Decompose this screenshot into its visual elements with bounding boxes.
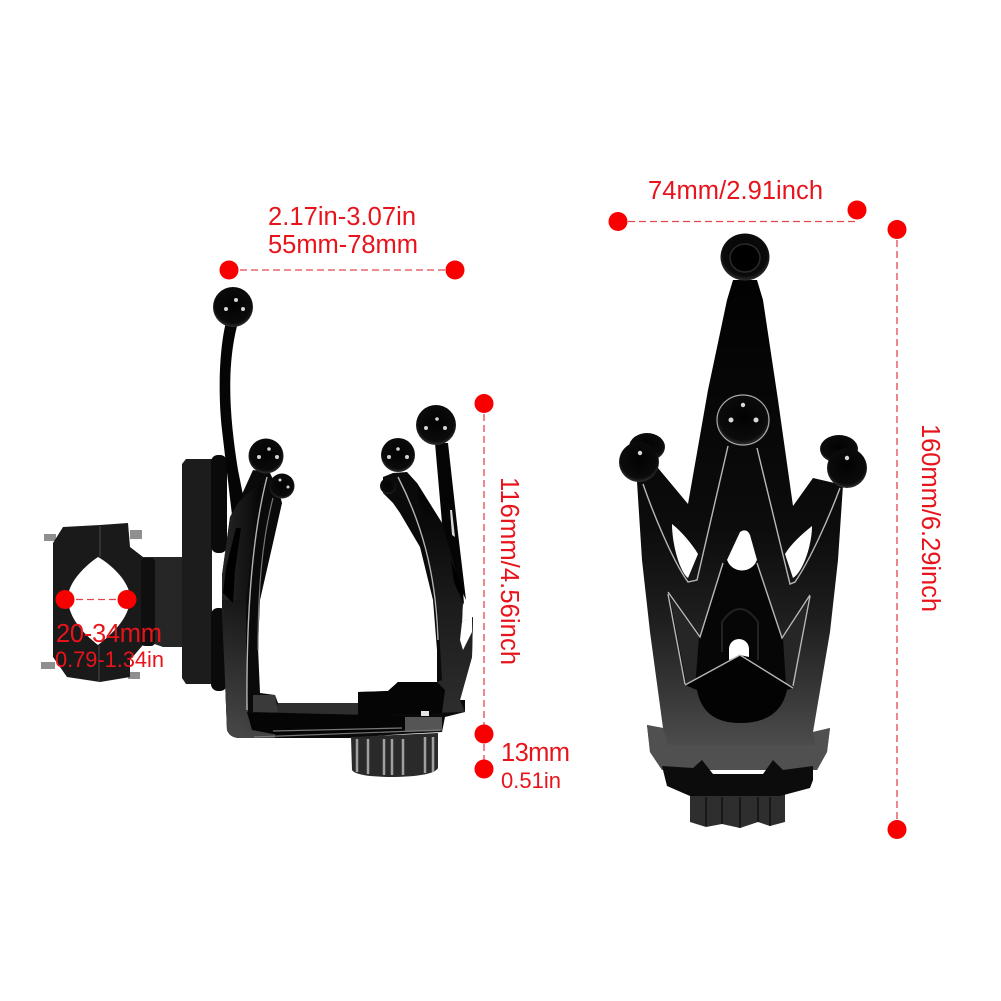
clamp bolts — [41, 530, 142, 679]
dimension: holder depth — [474, 394, 523, 778]
far right arm — [435, 443, 466, 600]
knob collar highlight — [421, 711, 429, 716]
mounting arch — [722, 609, 758, 660]
far arm slit — [450, 510, 455, 537]
flange shading — [647, 725, 830, 770]
ball tips — [213, 287, 456, 498]
clamp split lines — [99, 526, 100, 681]
crown body — [637, 280, 843, 770]
left corner piece — [253, 695, 278, 712]
cavity right panel — [783, 600, 808, 686]
ball glints — [224, 298, 447, 488]
top ball ring highlight — [730, 244, 760, 272]
tall rear arm — [220, 322, 243, 515]
right arm dark slit — [451, 560, 464, 605]
cavity left panel — [670, 597, 699, 688]
dimension: crown width — [608, 177, 866, 231]
base black bar — [247, 712, 405, 734]
mount neck — [143, 557, 186, 647]
dimension: crown height: 160mm/6.29inch — [916, 424, 944, 612]
dimension: clamp range — [55, 590, 164, 672]
dimension: holder opening width: 2.17in-3.07in — [268, 203, 416, 231]
right arm cut-outs — [460, 617, 472, 650]
dimension: knob height: 0.51in — [501, 768, 561, 793]
adjustment knob — [351, 733, 438, 777]
right arm shading — [417, 483, 473, 713]
dimension: holder opening width — [220, 203, 464, 280]
knob ribs — [357, 737, 433, 775]
body highlights — [247, 477, 438, 710]
left column shading — [222, 480, 262, 738]
base tray — [273, 703, 358, 716]
dimension: knob height: 13mm — [501, 739, 570, 767]
dimension: knob height — [501, 739, 570, 793]
crown ball tips — [619, 234, 867, 488]
mount plate — [182, 459, 212, 684]
dimension: holder opening width: 55mm-78mm — [268, 231, 418, 259]
lower column shading — [222, 600, 275, 738]
handlebar clamp — [53, 523, 146, 682]
neck collar — [141, 558, 155, 646]
front view crown holder — [619, 234, 867, 828]
right black block — [358, 682, 445, 716]
lower dark dome — [685, 655, 793, 723]
side view holder — [41, 287, 473, 777]
base ring — [662, 760, 813, 796]
knob — [690, 786, 785, 828]
crown ball glints — [638, 403, 849, 460]
inner highlight — [254, 498, 440, 737]
mount pads — [211, 455, 227, 691]
inner cavity — [668, 560, 810, 688]
dimension: holder depth: 116mm/4.56inch — [495, 477, 523, 665]
small keyhole opening — [729, 639, 749, 660]
dimension: crown height — [888, 220, 944, 839]
knob grooves — [706, 797, 770, 828]
dimension: crown width: 74mm/2.91inch — [648, 177, 823, 205]
left arm slit — [223, 528, 241, 603]
holder body — [222, 470, 473, 738]
grey button — [405, 717, 442, 732]
dimension: clamp range: 0.79-1.34in — [55, 647, 164, 672]
dimension: clamp range: 20-34mm — [56, 620, 162, 648]
crown highlights — [643, 446, 840, 688]
